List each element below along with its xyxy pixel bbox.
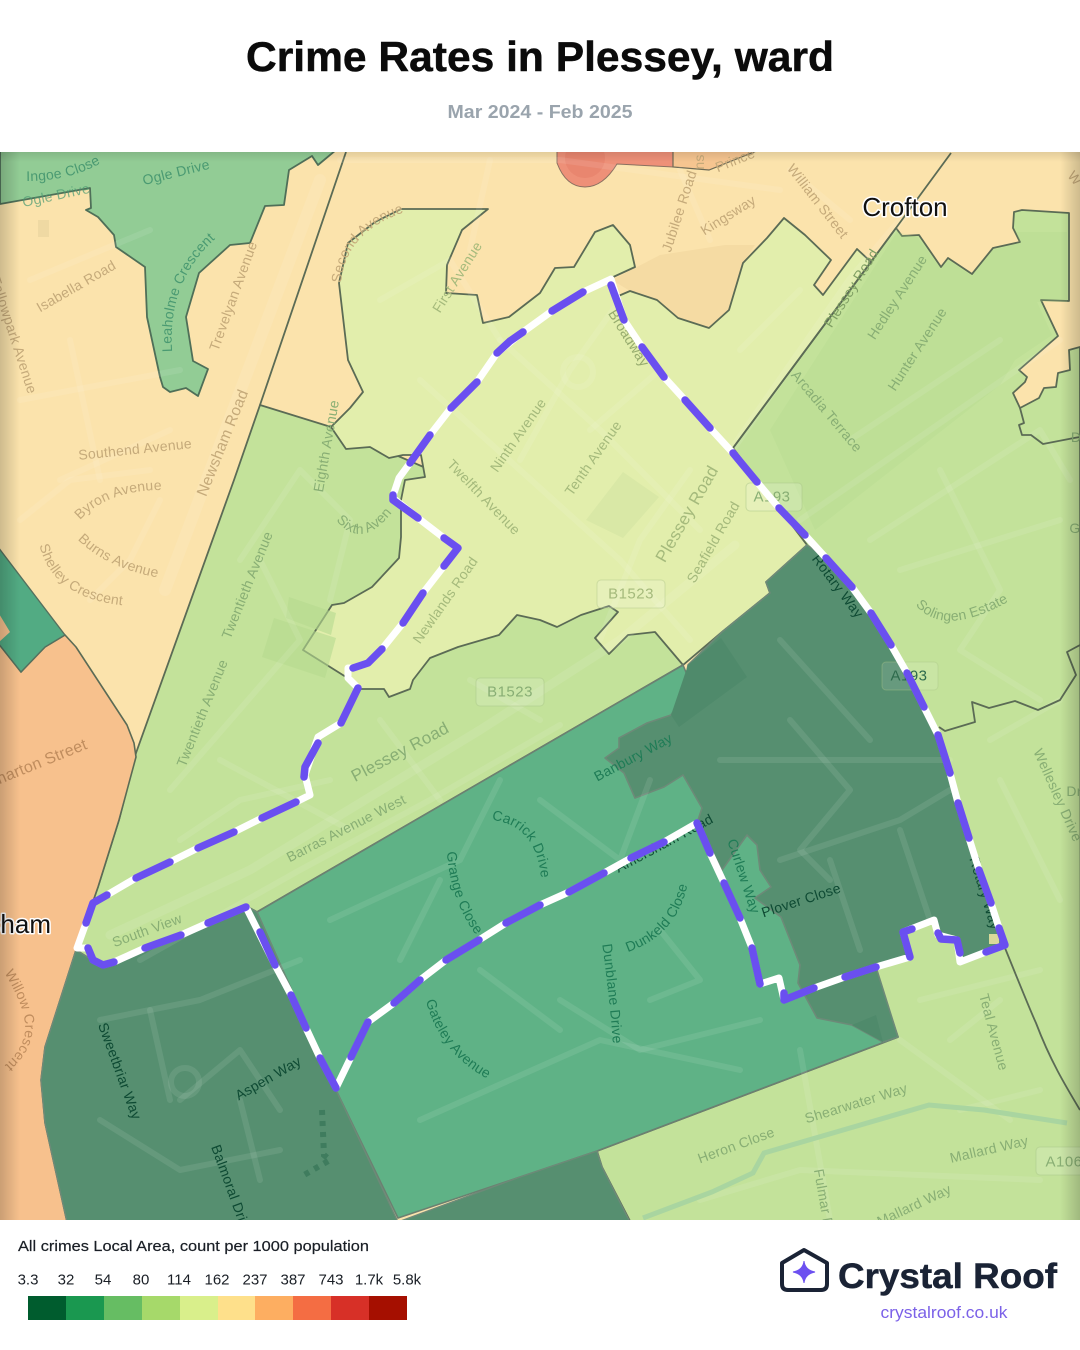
wordmark: Crystal Roof [838, 1257, 1057, 1296]
area: sports block [852, 1024, 883, 1042]
area: teal wedge west [0, 547, 65, 672]
legend values: 1.7k [355, 1272, 384, 1288]
street labels: Newlands Road [409, 554, 481, 646]
legend values [18, 1272, 422, 1288]
stream [643, 1105, 1067, 1218]
road badges: A193 [890, 668, 928, 684]
street labels: Mallard Way [948, 1132, 1030, 1166]
street labels: Ingoe Close [27, 158, 100, 184]
street labels: Sweetbriar Way [95, 1020, 145, 1122]
area: red hotspot [556, 152, 756, 188]
icon: house with star [782, 1250, 827, 1290]
street labels: Ogle Drive [21, 180, 91, 210]
area: dark north-east [605, 545, 1005, 1042]
logo: Crystal Roof [782, 1250, 1057, 1322]
street labels: Twentieth Avenue [173, 657, 231, 769]
legend values: 237 [242, 1272, 268, 1288]
area: darker block in dark zone [671, 658, 696, 716]
street labels: Plover Close [759, 880, 843, 920]
street labels: Jubilee Road [658, 168, 700, 254]
legend values: 387 [280, 1272, 306, 1288]
boundary line: west avenue [260, 152, 346, 405]
street labels: Willow Crescent [4, 968, 34, 1071]
street labels: Dunblane Drive [602, 944, 622, 1043]
street labels: Trevelyan Avenue [206, 239, 260, 353]
legend values: 80 [133, 1272, 149, 1288]
ward boundary: white base line [77, 279, 1005, 1088]
legend values: 54 [95, 1272, 111, 1288]
subtitle: date range: Mar 2024 - Feb 2025 [448, 101, 632, 122]
place label: Crofton: Crofton [862, 192, 948, 222]
street labels: Barras Avenue West [284, 791, 408, 865]
road badges [476, 483, 1080, 1175]
road badges: B1523 [608, 586, 654, 602]
street labels: Banbury Way [591, 730, 675, 784]
street labels: Ogle Drive [141, 156, 211, 188]
street labels: Eighth Avenue [310, 399, 342, 493]
street labels: Fulmar Drive [811, 1168, 841, 1252]
boundary lines east [733, 153, 1080, 731]
street labels: Dunkeld Close [626, 884, 687, 952]
street labels: Heron Close [695, 1124, 777, 1166]
railway boundary line [1005, 948, 1080, 1110]
street labels: Leaholme Crescent [162, 233, 215, 352]
street labels: Amersham Road [612, 811, 716, 875]
area: north-west green [0, 150, 336, 396]
street labels: Second Avenue [332, 206, 402, 282]
street labels: Rotary Way [966, 855, 1004, 931]
area: west mid green [76, 405, 700, 965]
street labels: Twentieth Avenue [218, 529, 276, 641]
area: dark south [398, 1151, 630, 1222]
street labels: First Avenue [429, 239, 485, 315]
legend title: All crimes Local Area, count per 1000 population [18, 1238, 369, 1255]
street labels: Twelfth Avenue [444, 456, 524, 538]
road badges: A193 [753, 488, 791, 506]
legend values: 3.3 [18, 1272, 38, 1288]
map panel [0, 152, 1080, 1220]
street labels: Plessey Road [821, 246, 881, 330]
street labels: Rotary Way [809, 551, 867, 621]
website link text: crystalroof.co.uk [880, 1304, 1008, 1322]
street labels: Shearwater Way [803, 1080, 909, 1126]
ward boundary: purple dashes [86, 285, 1005, 1088]
street labels: Isabella Road [34, 257, 118, 315]
street labels: Hunter Avenue [884, 305, 950, 393]
street labels: Plessey Road [652, 463, 722, 565]
legend values: 743 [318, 1272, 344, 1288]
street labels: Curlew Way [724, 837, 764, 915]
area: tan shaded block [612, 245, 755, 328]
legend values: 162 [204, 1272, 230, 1288]
street labels: Ninth Avenue [487, 395, 549, 475]
legend values: 114 [167, 1272, 191, 1288]
area: green pitches [283, 610, 336, 667]
street labels: Shelley Crescent [40, 544, 123, 606]
street labels: Grange Close [447, 852, 481, 934]
street labels: ns [691, 154, 707, 170]
street labels: Kingsway [698, 192, 758, 238]
street labels: Balmoral Drive [208, 1142, 256, 1238]
legend values: 5.8k [393, 1272, 422, 1288]
street labels: Plessey Road [348, 718, 452, 786]
area: dark south-west [41, 907, 398, 1222]
title: Crime Rates in Plessey, ward [246, 33, 834, 80]
street labels: Newsham Road [194, 387, 252, 499]
legend colour bar [28, 1296, 407, 1320]
street labels: Aspen Way [232, 1053, 304, 1103]
area: lime pitch [586, 472, 659, 538]
footbridge [304, 1110, 330, 1175]
area: cream base [0, 152, 1080, 1220]
street labels: Burns Avenue [78, 533, 158, 577]
area: east mid green [597, 210, 1080, 1221]
street labels: Hedley Avenue [864, 252, 930, 342]
legend values: 32 [58, 1272, 74, 1288]
area: darker band north-east [898, 232, 1067, 302]
area: orange sliver [0, 616, 10, 641]
street labels: Southend Avenue [77, 435, 193, 463]
road badges: B1523 [487, 684, 533, 700]
street labels: Teal Avenue [976, 992, 1012, 1072]
small yellow plot [989, 934, 999, 944]
area: north pale lime [303, 209, 871, 697]
street labels: Gateley Avenue [427, 1000, 489, 1078]
street labels: Tenth Avenue [561, 418, 625, 498]
street labels: William Street [784, 161, 852, 241]
map vignette [0, 152, 1080, 1220]
street labels: Broadway [605, 307, 653, 369]
street labels: South View [110, 910, 185, 950]
area: teal south-central [257, 665, 898, 1218]
street labels: Arcadia Terrace [788, 367, 866, 455]
area: small plot [38, 220, 49, 237]
street labels: Seafield Road [683, 499, 743, 585]
legend [18, 1238, 422, 1320]
street labels: Byron Avenue [74, 482, 161, 520]
street labels: Mallard Way [874, 1181, 954, 1229]
area: orange west [0, 635, 136, 1222]
street labels: Solingen Estate [917, 596, 1007, 624]
street labels: Carrick Drive [493, 811, 548, 877]
street labels: Prince [713, 145, 757, 175]
road network [20, 160, 1070, 1220]
